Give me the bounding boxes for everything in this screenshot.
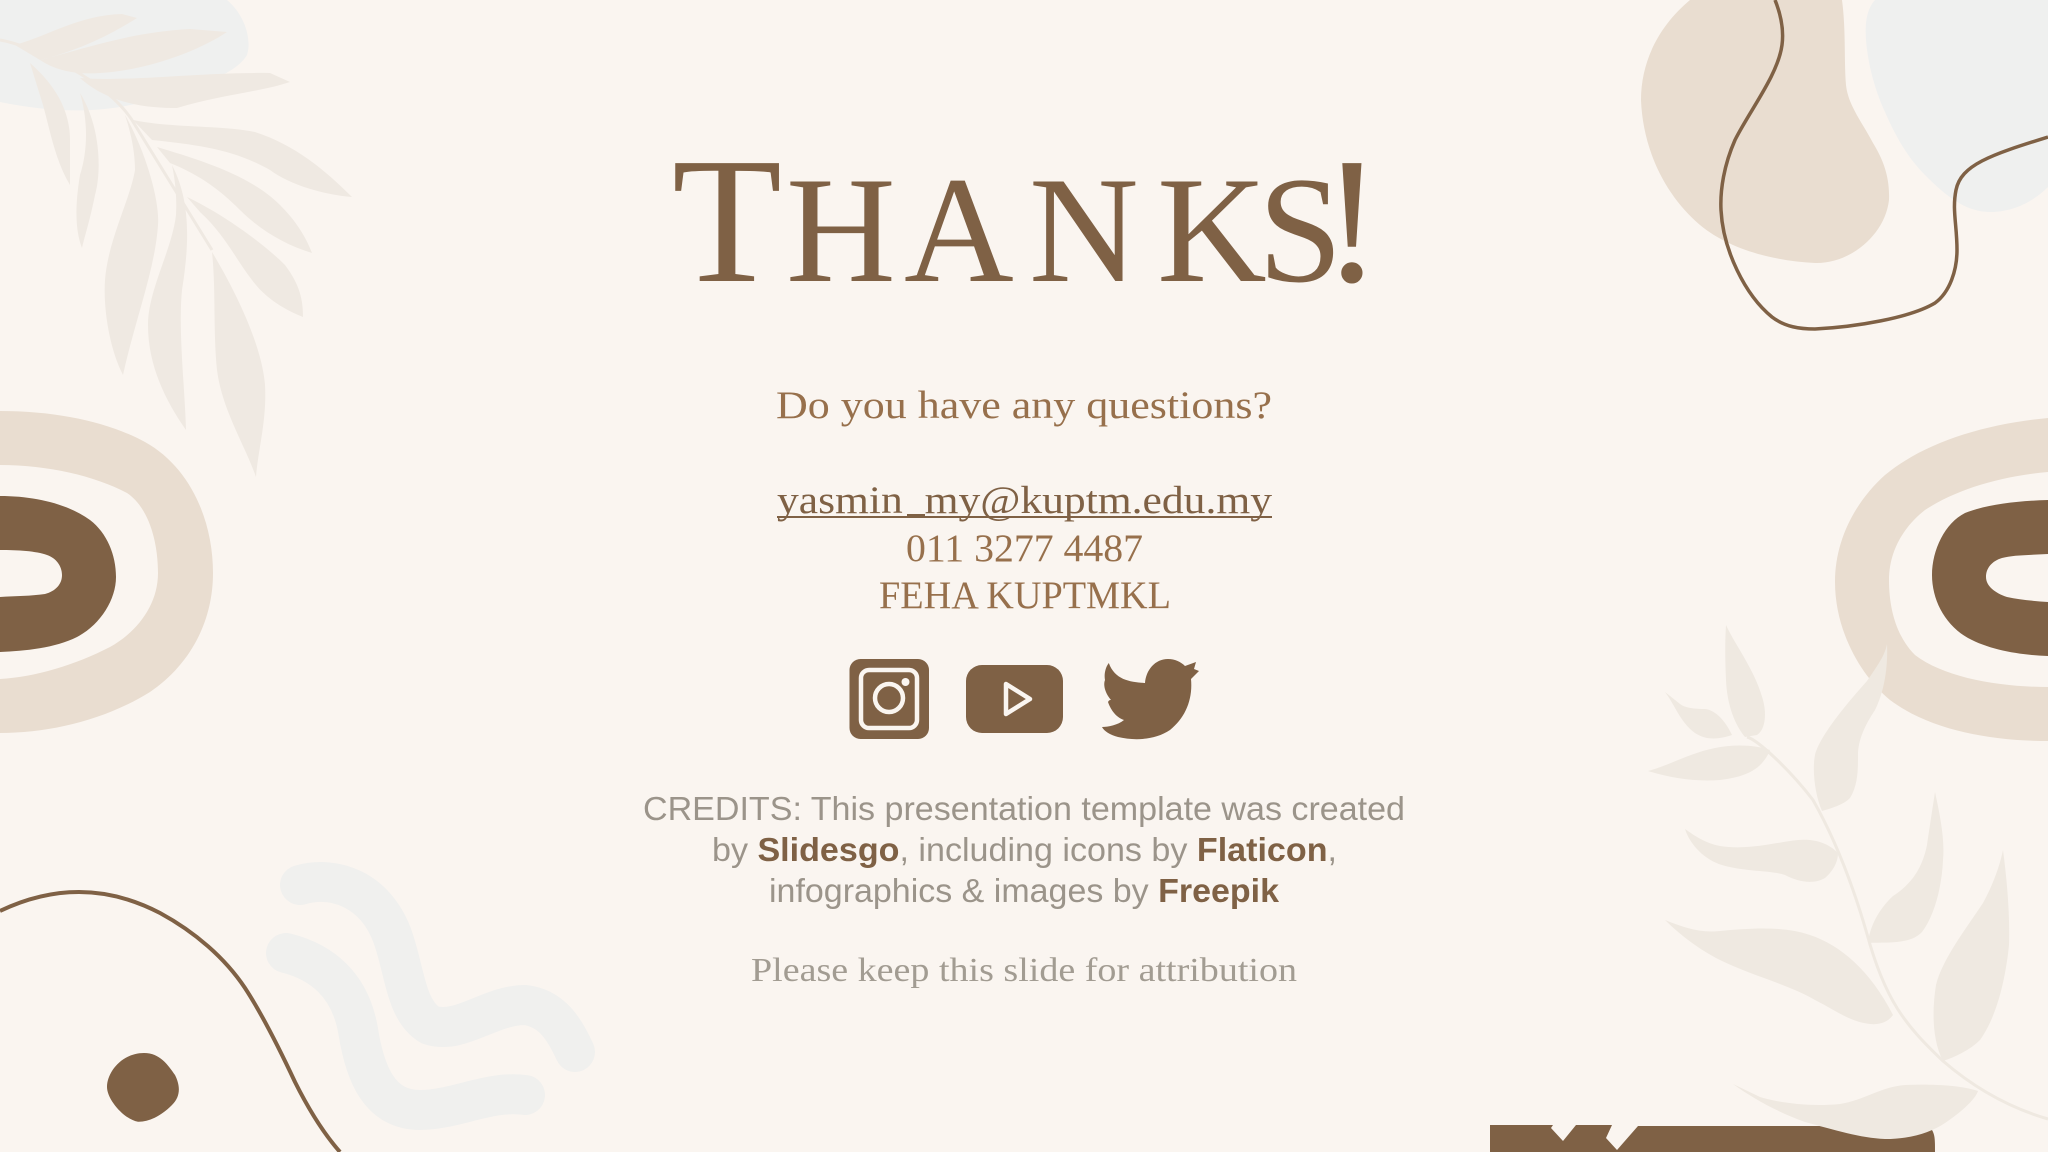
title: HANKS — [786, 146, 1343, 314]
icon: twitter — [1102, 659, 1199, 739]
icon: youtube — [966, 665, 1063, 733]
decoration: top-left leaf branch — [0, 14, 352, 477]
decoration: right leaf branch — [1648, 625, 2048, 1139]
text: credits: by Slidesgo, including icons by Flaticon, — [712, 831, 1337, 868]
title: T — [672, 121, 782, 320]
text: phone number: 011 3277 4487 — [906, 527, 1143, 570]
text: credits: infographics & images by Freepik — [769, 872, 1280, 909]
text: organisation: FEHA KUPTMKL — [879, 574, 1171, 617]
decoration: top-right beige blob — [1641, 0, 1889, 263]
decoration: bottom-right brown bar — [1490, 1125, 1935, 1152]
decoration: right concentric rings — [1835, 418, 2048, 741]
title: ! — [1322, 121, 1382, 320]
decoration: top-right grey blob — [1866, 0, 2048, 212]
decoration: bottom-left grey squiggles — [286, 882, 575, 1110]
text: question: Do you have any questions? — [776, 384, 1272, 427]
decoration: top-left grey blob — [0, 0, 249, 110]
decoration: top-right outline line — [1721, 0, 2048, 329]
text: credits — [643, 790, 1405, 909]
icon: instagram — [850, 659, 929, 739]
decoration: left concentric rings — [0, 411, 213, 733]
decoration: bottom-left curved line — [0, 892, 340, 1152]
text: attribution note: Please keep this slide for attribution — [751, 952, 1297, 989]
text: credits: CREDITS: This presentation template was created — [643, 790, 1405, 827]
decoration: bottom-left brown dot — [107, 1053, 179, 1122]
text: email link: yasmin_my@kuptm.edu.my — [777, 479, 1273, 522]
